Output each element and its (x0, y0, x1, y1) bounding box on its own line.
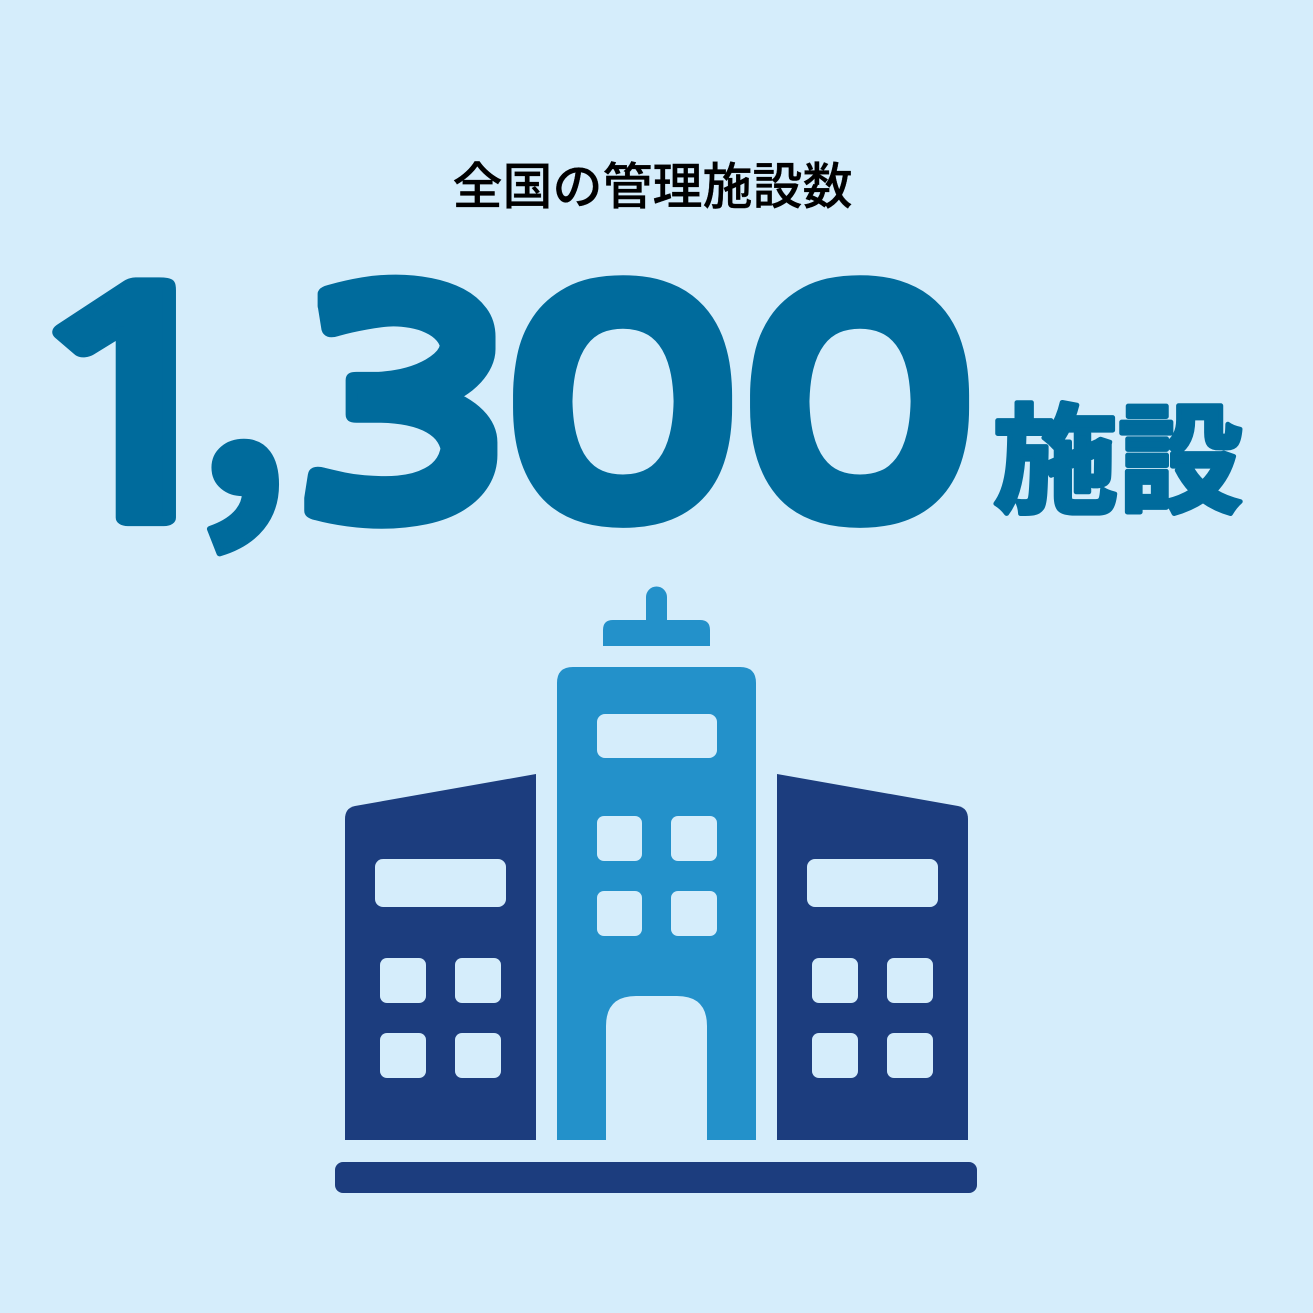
big number: 1,300: 0 (496, 263, 747, 560)
big number: 1,300: , (196, 197, 289, 570)
right building (777, 774, 968, 1140)
big number: 1,300: 1 (2, 256, 270, 568)
icon: building complex (335, 586, 977, 1193)
ground base (335, 1162, 977, 1193)
left building (345, 774, 536, 1140)
heading: 全国の管理施設数 (452, 159, 852, 215)
big number: 1,300: 0 (733, 263, 984, 560)
big number: 1,300 (2, 197, 984, 570)
center tower (557, 667, 756, 1140)
big number: 1,300: 3 (287, 262, 523, 560)
unit label: 施設 (993, 396, 1243, 528)
rooftop antenna (603, 586, 710, 646)
